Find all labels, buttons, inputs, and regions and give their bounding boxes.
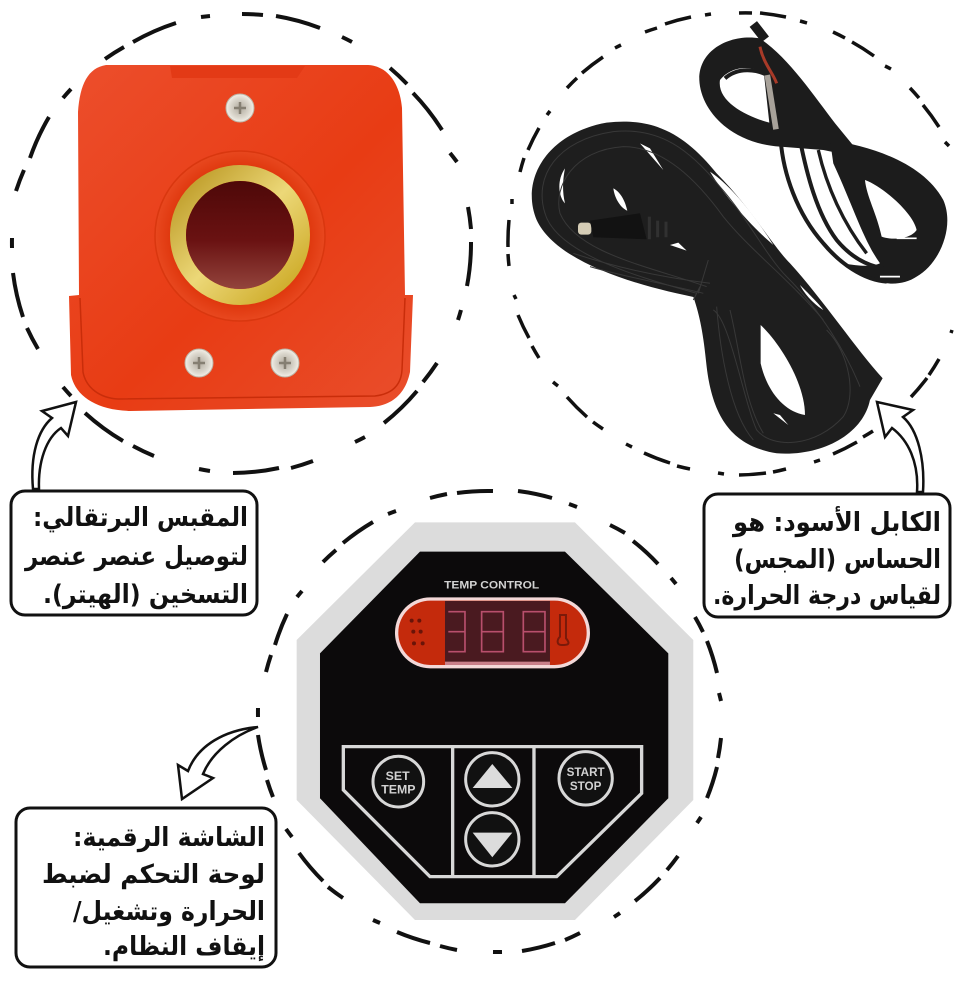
panel: digital control (258, 491, 721, 952)
panel: black cables (508, 13, 952, 475)
callout text: control: الحرارة وتشغيل/ (73, 897, 265, 927)
panel title: TEMP CONTROL (444, 579, 539, 591)
button: set temp (373, 756, 424, 807)
callout: cable (704, 494, 950, 617)
arrow: to control panel (178, 727, 258, 799)
button: set temp: SET (386, 769, 410, 783)
callout: control (16, 808, 276, 967)
cable plug (578, 213, 666, 239)
dashed circle: control (258, 491, 721, 952)
arrow: to cables (877, 402, 923, 492)
button: set temp: TEMP (381, 782, 415, 796)
callout text: control: لوحة التحكم لضبط (42, 860, 265, 890)
callout text: socket: التسخين (الهيتر). (43, 580, 248, 610)
button: start stop: STOP (570, 780, 602, 793)
small coil (699, 37, 947, 284)
icon: screws (185, 94, 299, 377)
icon: cable coils (532, 24, 947, 454)
dashed circle: cables (508, 13, 952, 475)
arrow: to socket (32, 402, 76, 489)
icon: red socket plate (69, 65, 413, 411)
button: start stop: START (567, 766, 605, 779)
button: start stop (559, 752, 612, 805)
callout: socket (11, 491, 257, 615)
callout text: socket: لتوصيل عنصر عنصر (23, 542, 248, 572)
large coil (532, 122, 883, 454)
callout text: socket (23, 503, 248, 610)
callout text: control: الشاشة الرقمية: (73, 823, 265, 853)
callout text: socket: المقبس البرتقالي: (33, 503, 248, 533)
panel: orange socket (12, 14, 471, 473)
callout text: control: إيقاف النظام. (103, 932, 265, 962)
button: up (466, 753, 519, 806)
temperature probe (753, 24, 777, 129)
button frame (343, 747, 642, 877)
icon: control panel (297, 522, 693, 920)
button: down (466, 813, 519, 866)
display (395, 597, 590, 668)
callout text: cable: الكابل الأسود: هو (731, 506, 941, 538)
callout text: cable (713, 506, 941, 611)
dashed circle: socket (12, 14, 471, 473)
callout text: control (42, 823, 265, 962)
